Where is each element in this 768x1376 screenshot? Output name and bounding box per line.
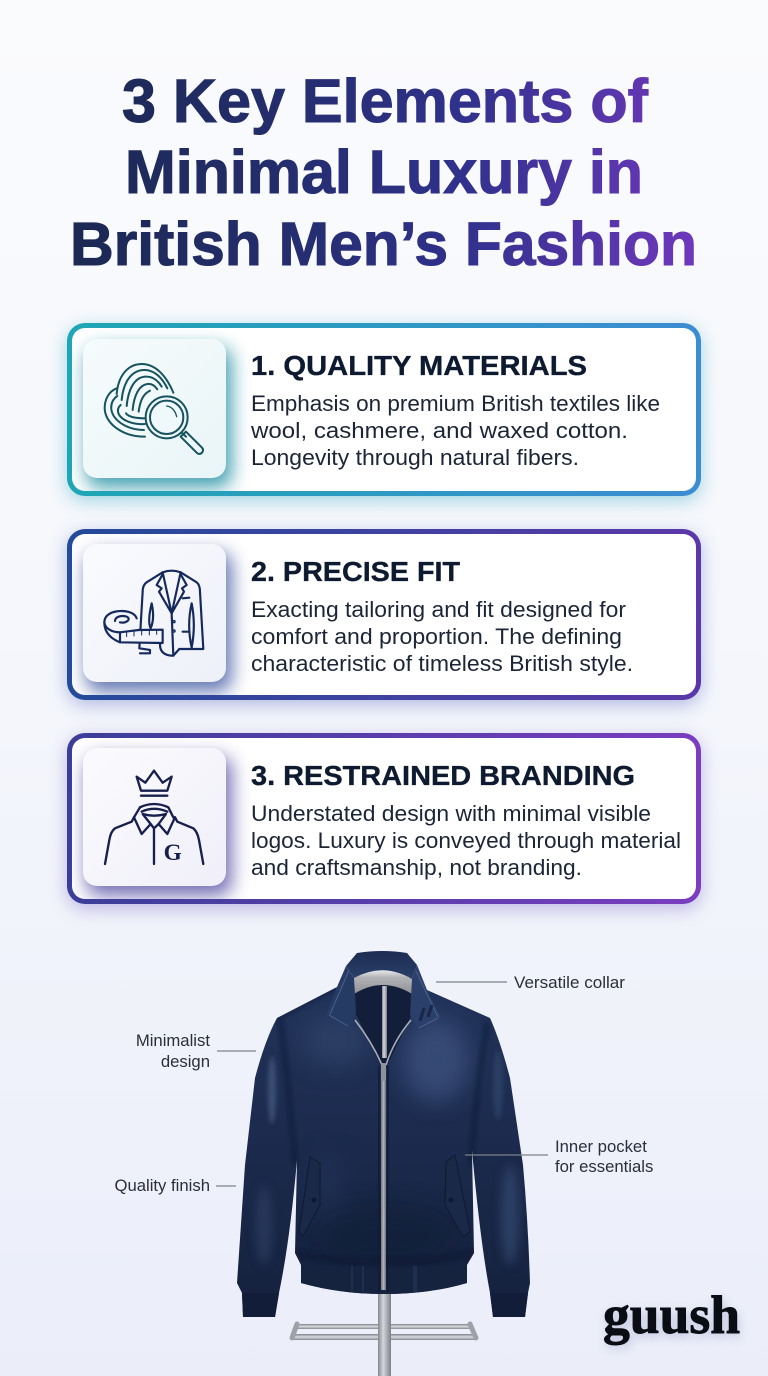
heading: 3. RESTRAINED BRANDING <box>251 760 635 791</box>
callout: inner pocket: Inner pocket <box>555 1137 647 1156</box>
zipper <box>355 1020 411 1292</box>
heading: 2. PRECISE FIT <box>251 556 460 587</box>
body text: Understated design with minimal visible <box>251 801 651 826</box>
body text: Exacting tailoring and fit designed for <box>251 597 627 622</box>
body text: Emphasis on premium British textiles like <box>251 391 660 416</box>
title: 3 Key Elements of <box>122 67 649 135</box>
title: Minimal Luxury in <box>125 138 643 206</box>
panel: precise fit <box>67 529 701 705</box>
logo: guush: guush <box>605 1289 741 1349</box>
heading: 1. QUALITY MATERIALS <box>251 350 587 381</box>
jacket body <box>237 987 530 1319</box>
body text: comfort and proportion. The defining <box>251 624 622 649</box>
icon tile: jacket and measuring tape <box>83 544 226 682</box>
callout: versatile collar: Versatile collar <box>514 973 625 992</box>
stand <box>292 1285 476 1376</box>
callout: minimalist design <box>136 1031 256 1071</box>
panel: quality materials <box>67 323 701 501</box>
body text: and craftsmanship, not branding. <box>251 855 582 880</box>
panel: restrained branding <box>67 733 701 909</box>
callout: minimalist design: design <box>161 1052 210 1071</box>
body text: wool, cashmere, and waxed cotton. <box>250 418 628 443</box>
icon tile: crown over shirt <box>83 748 226 886</box>
pockets <box>299 1155 470 1237</box>
title: British Men’s Fashion <box>70 210 697 278</box>
body text: logos. Luxury is conveyed through material <box>251 828 681 853</box>
title <box>70 67 697 278</box>
collar and interior <box>326 951 441 1072</box>
body text <box>250 391 660 470</box>
callout: minimalist design: Minimalist <box>136 1031 210 1050</box>
callout: inner pocket: for essentials <box>555 1157 653 1176</box>
logo: guush: guush <box>603 1285 740 1345</box>
body text <box>251 801 681 880</box>
body text: characteristic of timeless British style. <box>251 651 633 676</box>
jacket on stand <box>237 951 530 1376</box>
callout: quality finish: Quality finish <box>114 1176 210 1195</box>
body text <box>251 597 633 676</box>
icon tile: wool and magnifier <box>83 339 226 478</box>
callout: inner pocket <box>465 1137 653 1176</box>
body text: Longevity through natural fibers. <box>251 445 579 470</box>
icon tile: crown over shirt: G <box>164 840 182 866</box>
